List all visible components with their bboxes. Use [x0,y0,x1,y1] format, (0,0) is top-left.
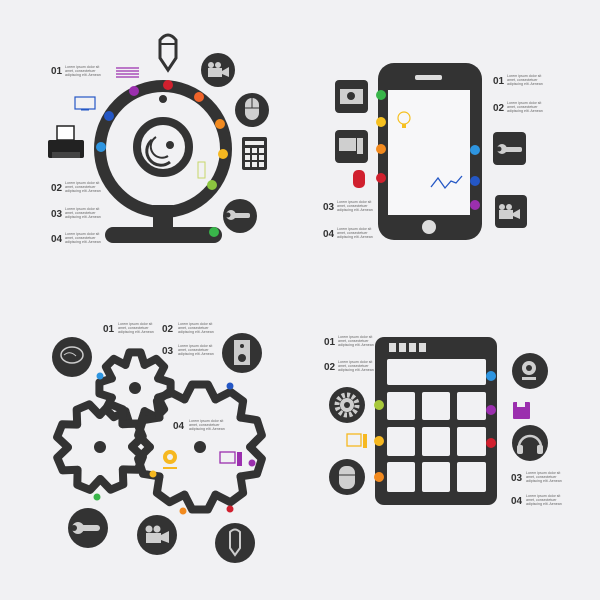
label 02: 02 [324,362,336,373]
calculator body [375,337,497,505]
label 01 [103,322,154,335]
label 03: amet, consectetuer [178,348,209,352]
label 01: 01 [103,324,115,335]
icon: yellow computer [347,434,367,448]
label 04: 04 [511,496,523,507]
labels: amet, consectetuer [65,69,96,73]
label 01: amet, consectetuer [507,78,538,82]
phone body [378,63,482,240]
label 04: 04 [323,229,335,240]
icon: line chart [431,176,462,188]
label 03 [162,344,214,357]
labels: Lorem ipsum dolor sit [65,65,99,69]
label 04: adipiscing elit. Aenean [65,240,101,244]
gear dots [94,372,256,514]
icon: floppy [513,402,530,419]
label 01: amet, consectetuer [338,339,369,343]
label 02: adipiscing elit. Aenean [178,330,214,334]
labels: adipiscing elit. Aenean [65,73,101,77]
label 02: 02 [493,103,505,114]
label 02: adipiscing elit. Aenean [507,109,543,113]
label 03: amet, consectetuer [65,211,96,215]
label 03: amet, consectetuer [337,204,368,208]
label 03: adipiscing elit. Aenean [526,479,562,483]
label 04 [173,419,225,432]
icon: headphones [512,425,548,461]
label 01: 01 [493,76,505,87]
label 01 [324,335,374,348]
label 04 [511,494,562,507]
icon: video camera [201,53,235,87]
icon: video [137,515,177,555]
label 01: Lorem ipsum dolor sit [338,335,372,339]
label 04: 04 [173,421,185,432]
icon: wrench [68,508,108,548]
panel: phone [323,63,543,240]
label 04: amet, consectetuer [337,231,368,235]
label 01: amet, consectetuer [118,326,149,330]
label 02: amet, consectetuer [507,105,538,109]
label 02: Lorem ipsum dolor sit [507,101,541,105]
label 03: adipiscing elit. Aenean [178,352,214,356]
icon: phone [198,162,205,178]
label 03: 03 [162,346,174,357]
label 04 [323,227,373,240]
icon: webcam [512,353,548,389]
label 01: Lorem ipsum dolor sit [507,74,541,78]
label 01: 01 [324,337,336,348]
label 03 [51,207,101,220]
label 02: amet, consectetuer [178,326,209,330]
label 02: 02 [162,324,174,335]
icon: wrench [493,132,526,165]
gears outline [55,352,264,510]
icon: calculator [242,137,267,170]
label 02 [493,101,543,114]
label 02: 02 [51,183,63,194]
icon: red mouse [353,170,365,188]
label 02: amet, consectetuer [338,364,369,368]
calculator dots [374,371,496,482]
icon: monitor [75,97,95,110]
label 04: amet, consectetuer [526,498,557,502]
label 03: adipiscing elit. Aenean [337,208,373,212]
webcam ring [100,86,226,243]
labels [51,65,101,77]
label 02: amet, consectetuer [65,185,96,189]
label 01: Lorem ipsum dolor sit [118,322,152,326]
label 03: 03 [323,202,335,213]
label 04: Lorem ipsum dolor sit [189,419,223,423]
label 04: 04 [51,234,63,245]
label 01 [493,74,543,87]
icon: mouse [235,93,269,127]
icon: purple computer [220,452,242,466]
icon: gear [329,387,365,423]
icon: camera [335,80,368,113]
label 04: amet, consectetuer [189,423,220,427]
label 04: Lorem ipsum dolor sit [526,494,560,498]
label 04: adipiscing elit. Aenean [337,235,373,239]
label 03: 03 [511,473,523,484]
icon: brain [52,337,92,377]
label 04: adipiscing elit. Aenean [189,427,225,431]
label 02 [324,360,374,373]
panel: webcam [48,35,269,245]
labels: 01 [51,66,63,77]
label 04: amet, consectetuer [65,236,96,240]
icon: mouse [329,459,365,495]
icon: printer [48,126,84,158]
label 01: adipiscing elit. Aenean [338,343,374,347]
label 04: Lorem ipsum dolor sit [65,232,99,236]
label 03: Lorem ipsum dolor sit [65,207,99,211]
icon: pencil [215,523,255,563]
ring dots [96,80,228,237]
label 03: Lorem ipsum dolor sit [526,471,560,475]
label 02: adipiscing elit. Aenean [65,189,101,193]
label 02 [162,322,214,335]
phone dots [376,90,480,210]
label 03: Lorem ipsum dolor sit [337,200,371,204]
label 04: Lorem ipsum dolor sit [337,227,371,231]
icon: speaker [222,333,262,373]
label 02: Lorem ipsum dolor sit [65,181,99,185]
label 02: Lorem ipsum dolor sit [338,360,372,364]
panel: calculator [324,335,562,507]
icon: wrench [223,199,257,233]
label 04 [51,232,101,245]
label 03: 03 [51,209,63,220]
label 04: adipiscing elit. Aenean [526,502,562,506]
panel: gears [52,322,264,563]
icon: computer [335,130,368,163]
label 01: adipiscing elit. Aenean [118,330,154,334]
label 02 [51,181,101,194]
icon: video [495,195,527,228]
label 02: Lorem ipsum dolor sit [178,322,212,326]
label 02: adipiscing elit. Aenean [338,368,374,372]
label 03 [511,471,562,484]
label 03: Lorem ipsum dolor sit [178,344,212,348]
icon: bulb [398,112,410,128]
icon: yellow webcam [163,450,177,469]
label 03 [323,200,373,213]
label 01: adipiscing elit. Aenean [507,82,543,86]
label 03: amet, consectetuer [526,475,557,479]
label 03: adipiscing elit. Aenean [65,215,101,219]
icon: purple lines [116,68,139,77]
icon: pencil [160,35,176,70]
